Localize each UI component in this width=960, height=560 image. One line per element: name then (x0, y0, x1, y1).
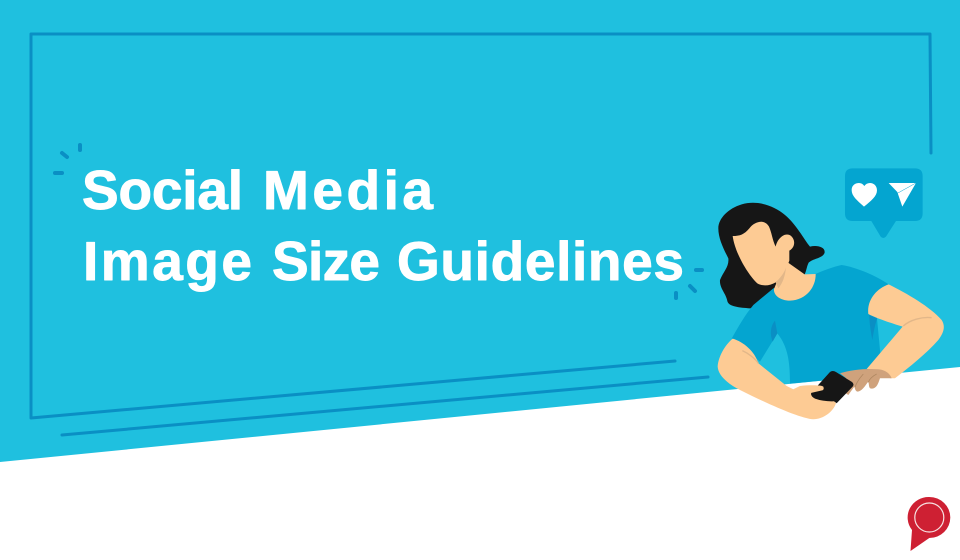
back hand (840, 369, 892, 395)
thumb (800, 385, 824, 393)
sparkle: figure (676, 270, 702, 298)
phone (811, 371, 854, 403)
title: Guidelines (397, 230, 684, 292)
icon: heart (852, 183, 877, 207)
logo: red speech pin (908, 497, 950, 551)
head (733, 222, 816, 301)
icon: paper plane (889, 183, 916, 207)
title: Social (82, 159, 243, 221)
icon: social bubble (845, 168, 923, 238)
title: Image (83, 230, 252, 292)
left arm (718, 339, 836, 419)
t-shirt (732, 265, 889, 384)
arms and phone (718, 284, 944, 419)
illustration: woman with phone (718, 203, 944, 419)
title: Media (263, 159, 433, 221)
right arm (867, 284, 944, 378)
hair (718, 203, 825, 308)
sparkle: title (55, 145, 80, 173)
title (82, 159, 684, 292)
frame lines (31, 34, 931, 435)
title: Size (272, 230, 380, 292)
